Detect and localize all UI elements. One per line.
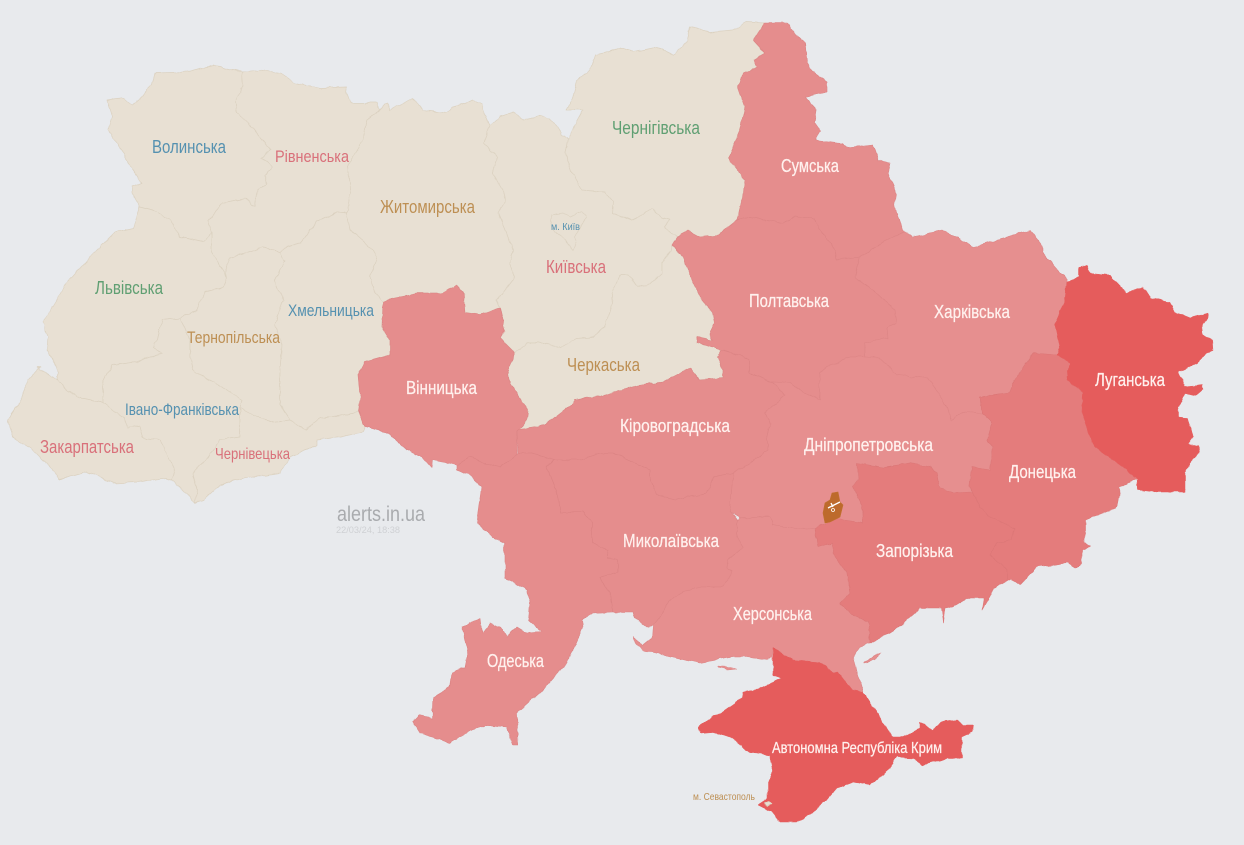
label: Волинська: Волинська — [152, 137, 227, 157]
label: Закарпатська: Закарпатська — [40, 437, 135, 457]
region: Zaporizhzhia — [815, 463, 1015, 643]
label: Тернопільська: Тернопільська — [187, 328, 280, 347]
label: Сумська: Сумська — [781, 155, 840, 176]
label: Полтавська: Полтавська — [749, 290, 830, 311]
region: Kherson — [633, 517, 880, 692]
label: Чернігівська: Чернігівська — [612, 118, 701, 138]
label: м. Київ: м. Київ — [551, 221, 580, 233]
region: Luhansk — [1055, 265, 1213, 492]
label: Дніпропетровська: Дніпропетровська — [804, 434, 934, 455]
region: Crimea — [698, 648, 973, 822]
region: Zakarpattia — [8, 367, 175, 483]
label: Львівська: Львівська — [95, 278, 164, 298]
label: Рівненська: Рівненська — [275, 147, 349, 166]
timestamp: 22/03/24, 18:38 — [336, 525, 400, 536]
region: Zhytomyr — [347, 98, 515, 315]
label: Хмельницька: Хмельницька — [288, 301, 374, 320]
region: Mykolaiv — [547, 453, 743, 627]
region: Lviv — [43, 207, 227, 402]
label: Житомирська: Житомирська — [380, 197, 476, 217]
label: Херсонська: Херсонська — [733, 603, 813, 624]
region: Volyn — [107, 65, 272, 242]
label: Донецька: Донецька — [1009, 461, 1077, 482]
label: Черкаська: Черкаська — [567, 355, 641, 375]
region: Odesa — [413, 453, 618, 745]
watermark: alerts.in.ua: alerts.in.ua — [337, 503, 425, 526]
region: Chernihiv — [565, 22, 765, 237]
region: Kyiv oblast — [483, 113, 677, 353]
label: Луганська: Луганська — [1095, 369, 1166, 390]
label: Одеська: Одеська — [487, 650, 545, 671]
region: Ivano-Frankivsk — [103, 318, 242, 503]
region: Cherkasy — [508, 245, 723, 430]
region: Ternopil — [180, 247, 290, 422]
region: Dnipropetrovsk — [730, 357, 993, 529]
region: Rivne — [208, 70, 380, 277]
region: Kharkiv — [855, 230, 1067, 420]
region: Kirovohrad — [517, 350, 785, 500]
region: Vinnytsia — [358, 285, 528, 468]
label: Вінницька: Вінницька — [406, 377, 478, 398]
region: Donetsk — [970, 353, 1137, 585]
region: Poltava — [672, 217, 897, 400]
label: Кіровоградська: Кіровоградська — [620, 415, 731, 436]
alert zone: Nikopol community — [823, 492, 843, 523]
label: Харківська: Харківська — [934, 301, 1011, 322]
label: Автономна Республіка Крим: Автономна Республіка Крим — [772, 740, 942, 757]
label: Чернівецька: Чернівецька — [215, 446, 290, 463]
region: Sevastopol — [765, 801, 771, 806]
label: м. Севастополь: м. Севастополь — [693, 791, 755, 803]
region: Sumy — [728, 23, 905, 260]
region: Kyiv city — [550, 212, 587, 250]
region: Khmelnytskyi — [275, 212, 390, 430]
label: Запорізька: Запорізька — [876, 540, 954, 561]
region: Chernivtsi — [193, 408, 365, 503]
label: Київська: Київська — [546, 257, 607, 277]
label: Миколаївська: Миколаївська — [623, 530, 720, 551]
label: Івано-Франківська: Івано-Франківська — [125, 400, 239, 419]
